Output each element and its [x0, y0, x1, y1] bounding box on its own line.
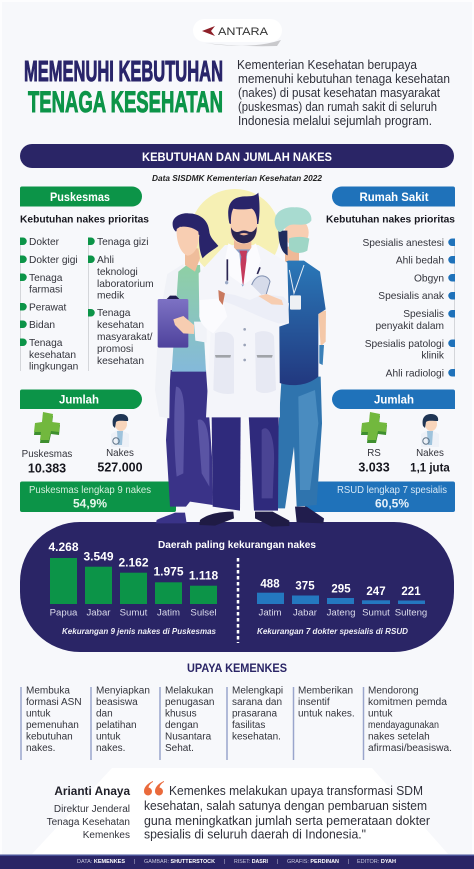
item 1: nakes.	[26, 743, 55, 754]
item 1: pemenuhan	[26, 720, 79, 731]
footer bar: DATA: KEMENKES	[77, 859, 125, 865]
chart heading: Daerah paling kekurangan nakes	[158, 539, 316, 551]
list column 2: teknologi	[97, 267, 138, 278]
panel: quote	[32, 768, 448, 854]
heading: jumlah	[332, 389, 455, 409]
item 4: prasarana	[232, 708, 277, 720]
list column 2: Ahli	[97, 255, 114, 266]
list column 1: Dokter gigi	[29, 255, 78, 266]
list column 1	[20, 237, 95, 372]
list: Ahli radiologi	[386, 368, 444, 380]
item 1: untuk	[26, 708, 51, 720]
bar chart: rsud: Kekurangan 7 dokter spesialis di RSUD	[257, 627, 408, 636]
icon: health worker	[111, 414, 129, 447]
title: TENAGA KESEHATAN	[28, 86, 223, 119]
subheading: Kebutuhan nakes prioritas	[20, 214, 149, 226]
list column 1: Bidan	[29, 320, 55, 331]
stat: nakes count: 527.000	[97, 460, 143, 474]
intro text: Indonesia melalui sejumlah program.	[238, 113, 432, 128]
footer bar: RISET: DASRI	[234, 859, 268, 865]
list column 2: laboratorium	[97, 279, 154, 290]
logo: ANTARA: ANTARA	[218, 26, 269, 38]
item 2: untuk	[96, 732, 121, 742]
list: Spesialis anak	[378, 291, 445, 302]
item 4: kesehatan.	[232, 732, 281, 742]
bar chart: rsud: 221	[401, 586, 421, 598]
icon: quotation marks	[144, 781, 164, 795]
list: penyakit dalam	[375, 321, 444, 332]
callout: rsud complete: 60,5%	[375, 496, 409, 510]
bar chart: rsud	[257, 579, 427, 636]
bar chart: rsud: Jateng	[327, 608, 355, 619]
list column 2: medik	[97, 290, 125, 302]
speaker: Direktur Jenderal	[54, 804, 130, 815]
item 2	[96, 686, 150, 754]
footer bar: |	[134, 859, 135, 865]
footer bar	[0, 854, 474, 869]
heading: jumlah: Jumlah	[59, 392, 99, 406]
quote text: guna meningkatkan jumlah serta pemerataan dokter	[144, 814, 430, 828]
stat: rs count: RS	[367, 448, 381, 459]
list	[362, 238, 455, 380]
panel: puskesmas needs	[20, 186, 154, 372]
list column 2: Tenaga	[97, 308, 131, 319]
heading: puskesmas: Puskesmas	[50, 190, 110, 204]
bar chart: puskesmas: Jabar	[86, 608, 111, 619]
intro text: Kementerian Kesehatan berupaya	[237, 57, 418, 72]
panel: shortage chart	[20, 522, 454, 652]
item 4: sarana dan	[232, 697, 282, 708]
item 2: nakes.	[96, 743, 125, 754]
heading: upaya kemenkes: UPAYA KEMENKES	[187, 661, 287, 675]
list: Ahli bedah	[396, 256, 444, 266]
intro text: memenuhi kebutuhan tenaga kesehatan	[238, 71, 450, 86]
item 4: Melengkapi	[232, 686, 283, 696]
intro text: (nakes) di pusat kesehatan masyarakat	[238, 85, 440, 100]
heading: puskesmas	[20, 186, 142, 207]
item 4	[232, 686, 283, 742]
panel: rumah sakit needs	[326, 186, 455, 380]
stat: nakes count: 1,1 juta	[410, 462, 450, 474]
title: MEMENUHI KEBUTUHAN	[24, 56, 223, 88]
heading: rumah sakit	[332, 186, 455, 207]
quote text: spesialis di seluruh daerah di Indonesia."	[144, 828, 366, 842]
stat: puskesmas count	[22, 449, 72, 476]
figure: male doctor	[199, 193, 289, 527]
stat: nakes count	[410, 448, 450, 474]
section header bar: KEBUTUHAN DAN JUMLAH NAKES	[142, 152, 332, 164]
stat: puskesmas count: Puskesmas	[22, 449, 72, 460]
quote text: kesehatan, salah satunya dengan pembaruan sistem	[144, 799, 427, 813]
bar chart: rsud: Sumut	[362, 608, 390, 619]
icon: green cross	[34, 412, 60, 443]
heading: jumlah: Jumlah	[374, 392, 414, 406]
list column 2: kesehatan	[97, 356, 144, 367]
item 6	[368, 686, 452, 754]
list column 1: Tenaga	[29, 273, 63, 284]
list: Obgyn	[414, 274, 444, 284]
stat: nakes count: Nakes	[416, 448, 444, 459]
bar chart: puskesmas: 1.118	[189, 568, 219, 582]
item 3: Nusantara	[165, 732, 212, 742]
bar chart: rsud: Jatim	[259, 608, 281, 619]
bar chart: rsud: 295	[331, 584, 351, 596]
item 2: Menyiapkan	[96, 686, 150, 696]
bar chart: rsud: 488	[260, 579, 280, 591]
item 3: Melakukan	[165, 686, 213, 696]
stat: nakes count: Nakes	[106, 448, 134, 459]
bar chart: puskesmas: Jatim	[157, 608, 180, 619]
speaker: Arianti Anaya	[54, 784, 130, 798]
quote text	[144, 784, 430, 842]
item 1: kebutuhan	[26, 732, 73, 742]
item 5	[298, 686, 355, 720]
list column 1: Perawat	[29, 302, 67, 314]
list column 2: masyarakat/	[97, 332, 153, 343]
stat: nakes count	[97, 448, 143, 474]
list column 2	[97, 237, 154, 367]
footer bar: |	[277, 859, 278, 865]
panel: upaya list	[21, 686, 452, 760]
item 6: komitmen pemda	[368, 697, 447, 708]
item 2: dan	[96, 708, 113, 720]
intro text: (puskesmas) dan rumah sakit di seluruh	[238, 99, 437, 114]
callout: rsud complete: RSUD lengkap 7 spesialis	[337, 485, 447, 496]
list: klinik	[421, 350, 445, 362]
data source: Data SISDMK Kementerian Kesehatan 2022	[152, 173, 322, 183]
icon: health worker	[421, 414, 439, 447]
speaker: Tenaga Kesehatan	[47, 817, 130, 828]
footer bar: |	[224, 859, 225, 865]
panel: jumlah puskesmas	[20, 389, 176, 512]
bar chart: puskesmas: 3.549	[83, 550, 114, 564]
item 6: untuk	[368, 708, 393, 720]
item 2: pelatihan	[96, 720, 137, 731]
item 3	[165, 686, 214, 754]
list column 1: kesehatan	[29, 350, 76, 361]
bar chart: puskesmas: Sulsel	[190, 608, 217, 619]
stat: rs count	[358, 448, 390, 474]
callout: rsud complete	[305, 482, 455, 512]
item 6: afirmasi/beasiswa.	[368, 743, 452, 754]
bar chart: puskesmas: Sumut	[120, 608, 148, 619]
figure: woman with clipboard	[155, 213, 218, 523]
logo: ANTARA	[193, 19, 282, 46]
list column 2: Tenaga gizi	[97, 237, 149, 248]
item 5: Memberikan	[298, 686, 353, 696]
item 2: beasiswa	[96, 697, 138, 708]
stat: puskesmas count: 10.383	[28, 462, 66, 476]
item 1: formasi ASN	[26, 697, 82, 708]
item 5: insentif	[298, 697, 330, 708]
list column 1: Dokter	[29, 237, 60, 248]
bar chart: puskesmas	[48, 540, 219, 636]
list column 1: lingkungan	[29, 362, 78, 372]
intro text	[237, 57, 450, 128]
item 6: Mendorong	[368, 686, 419, 696]
callout: puskesmas complete: Puskesmas lengkap 9 nakes	[29, 485, 151, 496]
footer bar: EDITOR: DYAH	[357, 859, 396, 865]
list column 1: farmasi	[29, 284, 62, 296]
quote text: Kemenkes melakukan upaya transformasi SDM	[169, 784, 423, 798]
bar chart: puskesmas: 2.162	[118, 556, 149, 570]
bar chart: puskesmas: Papua	[50, 608, 78, 619]
list: Spesialis	[403, 309, 444, 320]
bar chart: rsud: Sulteng	[395, 608, 427, 619]
bar chart: rsud: 375	[295, 580, 315, 592]
item 3: dengan	[165, 720, 198, 731]
title	[24, 56, 223, 119]
list: Spesialis anestesi	[362, 238, 444, 249]
item 3: penugasan	[165, 697, 214, 708]
item 4: fasilitas	[232, 720, 265, 731]
speaker: Kemenkes	[83, 830, 130, 841]
footer bar: |	[348, 859, 349, 865]
bar chart: puskesmas: Kekurangan 9 jenis nakes di Puskesmas	[62, 627, 217, 636]
callout: puskesmas complete: 54,9%	[73, 496, 107, 510]
footer bar: GRAFIS: PERDINAN	[287, 859, 339, 865]
figure: nurse with mask	[273, 207, 326, 523]
callout: puskesmas complete	[20, 482, 176, 512]
item 5: untuk nakes.	[298, 708, 355, 720]
item 3: Sehat.	[165, 743, 194, 754]
list column 1: Tenaga	[29, 338, 63, 349]
subheading: Kebutuhan nakes prioritas	[326, 214, 455, 226]
item 6: nakes setelah	[368, 732, 430, 742]
bar chart: rsud: 247	[366, 586, 386, 598]
speaker	[47, 784, 130, 841]
item 1	[26, 686, 82, 754]
heading: jumlah	[20, 389, 142, 409]
item 1: Membuka	[26, 686, 70, 696]
stat: rs count: 3.033	[358, 460, 390, 474]
bar chart: puskesmas: 1.975	[153, 565, 184, 579]
icon: green cross	[361, 412, 387, 443]
list: Spesialis patologi	[365, 339, 444, 350]
heading: rumah sakit: Rumah Sakit	[360, 190, 429, 204]
yellow sun circle	[190, 189, 280, 279]
footer bar: GAMBAR: SHUTTERSTOCK	[144, 859, 215, 865]
bar chart: rsud: Jabar	[293, 608, 318, 619]
item 6: mendayagunakan	[368, 720, 439, 731]
list column 2: kesehatan	[97, 320, 144, 331]
illustration: three health workers	[155, 189, 326, 527]
panel: jumlah rumah sakit	[305, 389, 455, 512]
bar chart: puskesmas: 4.268	[48, 540, 79, 554]
section header bar	[20, 144, 454, 168]
item 3: khusus	[165, 708, 197, 720]
list column 2: promosi	[97, 344, 133, 355]
